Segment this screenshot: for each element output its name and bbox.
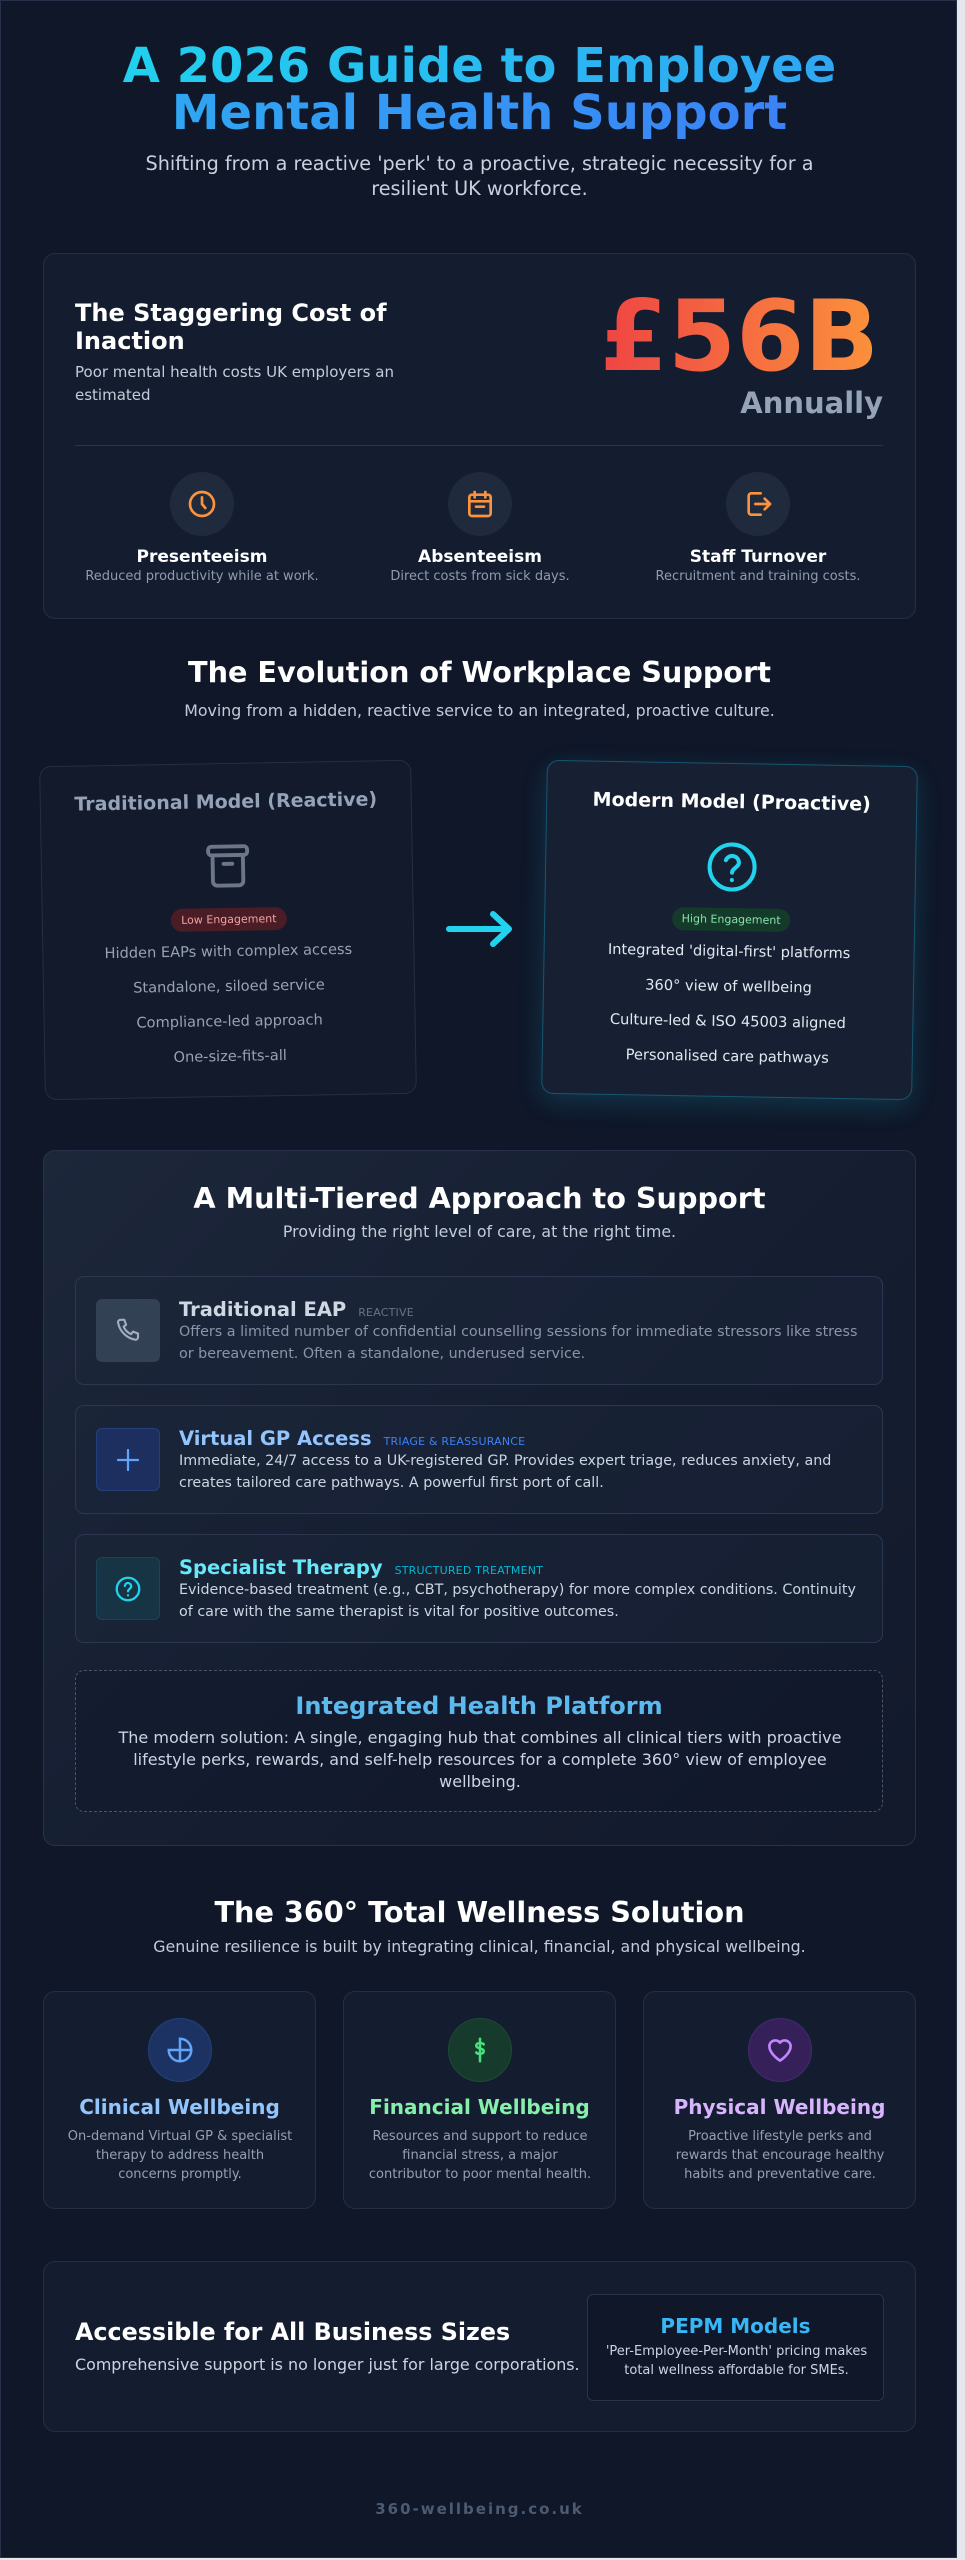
icon: calendar	[448, 472, 512, 536]
list: traditional features: One-size-fits-all	[173, 1047, 287, 1066]
label: staff turnover: Staff Turnover	[690, 547, 826, 567]
heading: integrated platform: Integrated Health Platform	[295, 1692, 663, 1720]
list: modern features: Integrated 'digital-first' platforms	[608, 941, 850, 962]
list: traditional features: Compliance-led approach	[136, 1011, 323, 1032]
tier: virtual GP	[75, 1405, 883, 1514]
title: specialist therapy: Specialist Therapy STRUCTURED TREATMENT	[179, 1556, 543, 1579]
stat: £56B: £56B	[600, 280, 879, 394]
text: physical: Proactive lifestyle perks and rewards that encourage healthy habits and preventative care.	[676, 2129, 884, 2182]
panel: modern model	[541, 760, 918, 1100]
heading: traditional model: Traditional Model (Reactive)	[74, 788, 377, 816]
list: modern features: Personalised care pathways	[626, 1046, 829, 1067]
icon: exit	[726, 472, 790, 536]
icon: question circle	[708, 842, 757, 892]
icon: clinical	[148, 2018, 212, 2082]
text: PEPM: 'Per-Employee-Per-Month' pricing makes total wellness affordable for SMEs.	[606, 2344, 867, 2378]
title	[123, 38, 836, 141]
footer: 360-wellbeing.co.uk	[375, 2500, 584, 2518]
list: traditional features	[104, 941, 352, 1066]
panel: cost of inaction	[43, 253, 916, 619]
title: physical: Physical Wellbeing	[674, 2095, 885, 2119]
badge: low engagement	[171, 907, 287, 932]
title: Mental Health Support	[172, 85, 787, 141]
heading: cost of inaction: The Staggering Cost of Inaction	[75, 299, 387, 355]
panel: accessible for all	[43, 2261, 916, 2432]
card: physical wellbeing	[643, 1991, 916, 2209]
list: traditional features: Hidden EAPs with complex access	[104, 941, 352, 962]
heading: PEPM: PEPM Models	[660, 2314, 811, 2338]
label: absenteeism: Absenteeism	[418, 547, 542, 567]
icon: plus	[96, 1428, 160, 1491]
label: presenteeism: Presenteeism	[136, 547, 267, 567]
icon: question	[96, 1557, 160, 1620]
icon: phone	[96, 1299, 160, 1362]
card: clinical wellbeing	[43, 1991, 316, 2209]
text: GP description: Immediate, 24/7 access to a UK-registered GP. Provides expert triage, reduces anxiety, and creates tailored care pathways. A powerful first port of call.	[179, 1453, 831, 1491]
card: financial wellbeing	[343, 1991, 616, 2209]
title: virtual GP: Virtual GP Access TRIAGE & REASSURANCE	[179, 1427, 525, 1450]
badge: low engagement: Low Engagement	[181, 912, 277, 927]
list: modern features	[608, 941, 850, 1067]
heading: evolution: The Evolution of Workplace Support	[188, 655, 771, 689]
subtitle: Shifting from a reactive 'perk' to a proactive, strategic necessity for a resilient UK workforce.	[146, 152, 813, 200]
arrow	[446, 911, 512, 947]
label: staff turnover: Recruitment and training costs.	[656, 569, 860, 584]
callout: integrated health platform	[75, 1670, 883, 1812]
text: cost description: Poor mental health costs UK employers an estimated	[75, 363, 394, 404]
badge: high engagement: High Engagement	[682, 912, 781, 927]
subheading: evolution: Moving from a hidden, reactive service to an integrated, proactive culture.	[184, 701, 775, 720]
icon: dollar	[448, 2018, 512, 2082]
title: financial: Financial Wellbeing	[369, 2095, 590, 2119]
heading: 360 wellness: The 360° Total Wellness Solution	[214, 1895, 745, 1929]
icon: heart	[748, 2018, 812, 2082]
list: modern features: 360° view of wellbeing	[645, 977, 812, 996]
icon: archive box	[206, 844, 250, 888]
tier: specialist therapy	[75, 1534, 883, 1643]
text: therapy description: Evidence-based treatment (e.g., CBT, psychotherapy) for more complex conditions. Continuity of care with the same therapist is vital for positive outcomes.	[179, 1582, 856, 1620]
text: EAP description: Offers a limited number of confidential counselling sessions for immediate stressors like stress or bereavement. Often a standalone, underused service.	[179, 1324, 857, 1362]
heading: modern model: Modern Model (Proactive)	[592, 789, 871, 815]
stat label: annually: Annually	[740, 386, 883, 420]
heading: multi-tiered: A Multi-Tiered Approach to Support	[193, 1181, 766, 1215]
title: clinical: Clinical Wellbeing	[79, 2095, 280, 2119]
subheading: 360 wellness: Genuine resilience is built by integrating clinical, financial, and physical wellbeing.	[153, 1937, 806, 1956]
text: financial: Resources and support to reduce financial stress, a major contributor to poor mental health.	[369, 2129, 591, 2182]
label: absenteeism: Direct costs from sick days.	[390, 569, 570, 584]
text: accessible: Comprehensive support is no longer just for large corporations.	[75, 2355, 580, 2374]
heading: accessible: Accessible for All Business Sizes	[75, 2318, 510, 2346]
title: traditional EAP: Traditional EAP REACTIVE	[179, 1298, 414, 1321]
label: presenteeism	[85, 547, 319, 584]
text: integrated description: The modern solution: A single, engaging hub that combines all clinical tiers with proactive lifestyle perks, rewards, and self-help resources for a complete 360° view of employee wellbeing.	[119, 1728, 841, 1791]
tier: traditional EAP	[75, 1276, 883, 1385]
list: traditional features: Standalone, siloed service	[133, 976, 325, 997]
label: absenteeism	[390, 547, 570, 584]
subheading: multi-tiered: Providing the right level of care, at the right time.	[283, 1222, 676, 1241]
title: A 2026 Guide to Employee	[123, 38, 836, 94]
icon: clock	[170, 472, 234, 536]
callout: PEPM models	[587, 2294, 884, 2401]
list: modern features: Culture-led & ISO 45003 aligned	[610, 1011, 846, 1032]
label: staff turnover	[656, 547, 860, 584]
panel: traditional model	[39, 760, 417, 1100]
text: clinical: On-demand Virtual GP & specialist therapy to address health concerns promptly.	[68, 2129, 292, 2182]
badge: high engagement	[672, 907, 790, 932]
panel: multi-tiered approach	[43, 1150, 916, 1846]
label: presenteeism: Reduced productivity while at work.	[85, 569, 319, 584]
